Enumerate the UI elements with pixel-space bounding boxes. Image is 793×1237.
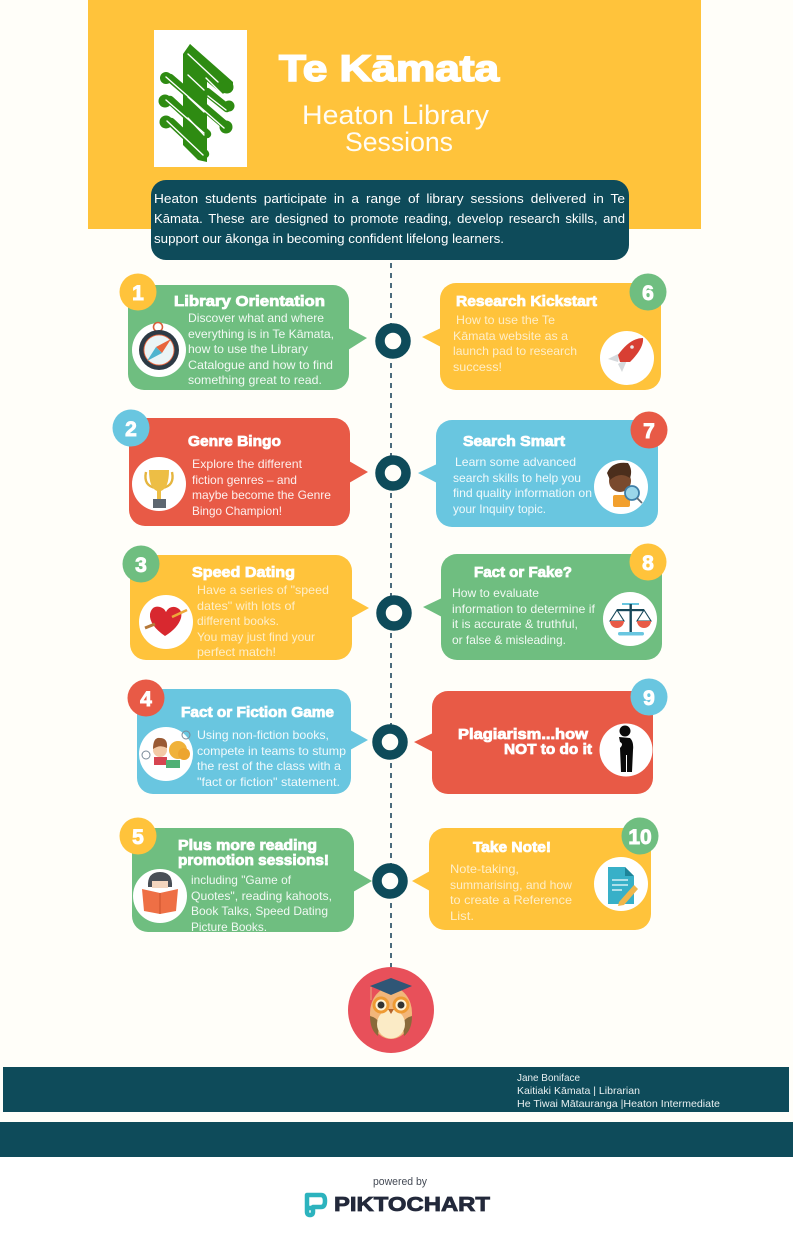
title text: promotion sessions! <box>178 852 329 869</box>
intro text box: Heaton students participate in a range of library sessions delivered in Te <box>154 191 625 206</box>
piktochart branding: powered by <box>373 1176 427 1188</box>
panel: session 1 Library Orientation: Catalogue and how to find <box>188 359 333 372</box>
intro text box: support our ākonga in becoming confident lifelong learners. <box>154 231 504 246</box>
icon: heart with arrow <box>139 595 193 649</box>
title text: Plus more reading <box>178 837 317 854</box>
icon: two people talking <box>139 727 193 781</box>
footer band: author credit <box>3 1067 789 1112</box>
panel: session 6 Research Kickstart: Kāmata website as a <box>453 330 569 343</box>
footer band: author credit: Kaitiaki Kāmata | Librarian <box>517 1085 640 1097</box>
icon: document with pencil <box>594 857 648 911</box>
title text <box>178 837 329 869</box>
panel: session 1 Library Orientation: how to use the Library <box>188 343 308 356</box>
panel: session 1 Library Orientation: Library Orientation <box>174 293 325 310</box>
panel: session 6 Research Kickstart: 6 <box>642 282 654 305</box>
panel: session 6 Research Kickstart: How to use the Te <box>456 314 555 327</box>
panel: session 2 Genre Bingo: maybe become the Genre <box>192 489 331 502</box>
footer band: empty <box>0 1122 793 1157</box>
panel: session 7 Search Smart: 7 <box>643 420 655 443</box>
panel: session 2 Genre Bingo: Explore the different <box>192 458 303 471</box>
panel: session 9 Plagiarism: 9 <box>643 687 655 710</box>
panel: session 6 Research Kickstart: launch pad to research <box>453 345 577 358</box>
panel: session 4 Fact or Fiction Game: 4 <box>140 688 152 711</box>
title text: NOT to do it <box>504 741 592 758</box>
panel: session 2 Genre Bingo: Genre Bingo <box>188 433 281 450</box>
panel: session 10 Take Note!: to create a Reference <box>450 894 572 907</box>
panel: session 4 Fact or Fiction Game: Using non-fiction books, <box>197 729 329 742</box>
panel: session 4 Fact or Fiction Game <box>128 680 368 794</box>
icon: rocket <box>600 331 654 385</box>
panel: session 3 Speed Dating: different books. <box>197 615 279 628</box>
panel: session 2 Genre Bingo: Bingo Champion! <box>192 505 282 518</box>
panel: session 1 Library Orientation: 1 <box>132 282 144 305</box>
panel: session 5 reading promotion: Book Talks, Speed Dating <box>191 905 328 918</box>
panel: session 3 Speed Dating: dates" with lots of <box>197 600 296 613</box>
panel: session 1 Library Orientation: everything is in Te Kāmata, <box>188 328 334 341</box>
panel: session 8 Fact or Fake?: How to evaluate <box>452 587 539 600</box>
panel: session 5 reading promotion: Quotes", reading kahoots, <box>191 890 332 903</box>
panel: session 8 Fact or Fake? <box>423 544 666 660</box>
subtitle: Heaton Library <box>302 100 490 130</box>
white footer area <box>0 1157 793 1237</box>
panel: session 10 Take Note!: List. <box>450 910 474 923</box>
panel: session 7 Search Smart: your Inquiry topic. <box>453 503 546 516</box>
title text <box>458 726 592 758</box>
panel: session 5 reading promotion: Picture Books. <box>191 921 267 934</box>
panel: session 8 Fact or Fake?: information to determine if <box>452 603 596 616</box>
intro text box: Kāmata. These are designed to promote reading, develop research skills, and <box>154 211 625 226</box>
panel: session 8 Fact or Fake?: or false & misleading. <box>452 634 566 647</box>
panel: session 3 Speed Dating: perfect match! <box>197 646 276 659</box>
icon: owl in graduation cap <box>348 967 434 1053</box>
panel: session 4 Fact or Fiction Game: Fact or Fiction Game <box>181 704 334 721</box>
timeline rings <box>377 328 407 894</box>
panel: session 7 Search Smart <box>418 412 668 527</box>
panel: session 5 reading promotion: including "Game of <box>191 874 292 887</box>
footer band: author credit: Jane Boniface <box>517 1072 580 1084</box>
footer band: author credit: He Tiwai Mātauranga |Heaton Intermediate <box>517 1098 720 1110</box>
panel: session 8 Fact or Fake?: it is accurate & truthful, <box>452 618 578 631</box>
panel: session 7 Search Smart: Search Smart <box>463 433 565 450</box>
panel: session 1 Library Orientation: something great to read. <box>188 374 322 387</box>
panel: session 5 reading promotion <box>120 818 372 934</box>
panel: session 4 Fact or Fiction Game: compete in teams to stump <box>197 745 346 758</box>
subtitle: Sessions <box>345 127 453 157</box>
icon: trophy <box>132 457 186 511</box>
piktochart branding: PIKTOCHART <box>334 1194 490 1216</box>
panel: session 4 Fact or Fiction Game: "fact or fiction" statement. <box>197 776 340 789</box>
panel: yellow header <box>88 0 701 229</box>
panel: session 7 Search Smart: Learn some advanced <box>455 456 576 469</box>
title text: Plagiarism...how <box>458 726 588 743</box>
panel: session 2 Genre Bingo: 2 <box>125 418 137 441</box>
panel: session 5 reading promotion: 5 <box>132 826 144 849</box>
panel: session 3 Speed Dating: You may just find your <box>197 631 315 644</box>
icon: scales <box>603 592 657 646</box>
panel: session 3 Speed Dating: Have a series of "speed <box>197 584 329 597</box>
panel: session 7 Search Smart: search skills to help you <box>453 472 581 485</box>
panel: session 3 Speed Dating <box>122 546 369 660</box>
icon: child reading a book <box>133 869 187 923</box>
panel: session 9 Plagiarism <box>414 678 668 794</box>
panel: session 8 Fact or Fake?: 8 <box>642 552 654 575</box>
panel: session 10 Take Note!: summarising, and how <box>450 879 573 892</box>
icon: compass <box>132 322 186 377</box>
subtitle <box>302 100 490 157</box>
panel: session 1 Library Orientation: Discover what and where <box>188 312 324 325</box>
icon: thinking figure <box>600 724 652 776</box>
panel: session 4 Fact or Fiction Game: the rest of the class with a <box>197 760 342 773</box>
panel: session 10 Take Note! <box>412 818 658 930</box>
title: Te Kāmata <box>279 48 499 89</box>
timeline dashed line <box>390 263 392 968</box>
panel: session 1 Library Orientation <box>120 274 367 390</box>
panel: session 8 Fact or Fake?: Fact or Fake? <box>474 564 572 581</box>
piktochart branding <box>307 1176 490 1216</box>
panel: session 3 Speed Dating: 3 <box>135 554 147 577</box>
icon: person with magnifying glass <box>594 460 648 514</box>
panel: session 10 Take Note!: 10 <box>628 826 652 849</box>
panel: session 7 Search Smart: find quality information on <box>453 487 592 500</box>
panel: session 10 Take Note!: Take Note! <box>473 839 551 856</box>
panel: session 10 Take Note!: Note-taking, <box>450 863 519 876</box>
intro text box <box>151 180 629 260</box>
icon: piktochart logo mark <box>307 1195 325 1215</box>
panel: session 6 Research Kickstart: success! <box>453 361 502 374</box>
panel: session 3 Speed Dating: Speed Dating <box>192 564 295 581</box>
panel: session 6 Research Kickstart: Research Kickstart <box>456 293 597 310</box>
panel: session 6 Research Kickstart <box>422 274 666 390</box>
panel: session 2 Genre Bingo: fiction genres – and <box>192 474 297 487</box>
panel: session 2 Genre Bingo <box>112 410 368 526</box>
logo: green koru emblem <box>154 30 247 167</box>
